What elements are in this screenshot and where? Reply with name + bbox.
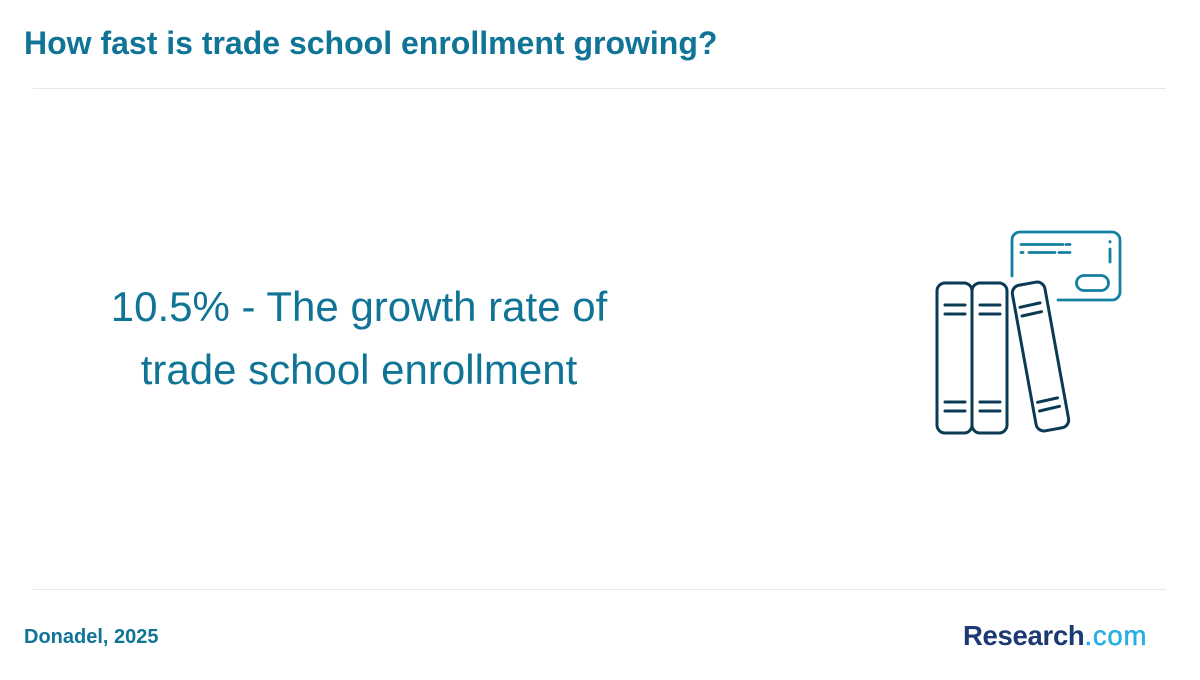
source citation: Donadel, 2025 [24, 626, 159, 648]
main statistic text: 10.5% - The growth rate of [111, 283, 607, 330]
logo: Research.com [963, 620, 1147, 651]
main statistic text [111, 283, 608, 393]
title: How fast is trade school enrollment growing? [24, 25, 717, 61]
icon: books [937, 281, 1070, 433]
icon: card [1012, 232, 1120, 300]
main statistic text: trade school enrollment [141, 346, 577, 393]
icon: books and card [936, 230, 1122, 434]
